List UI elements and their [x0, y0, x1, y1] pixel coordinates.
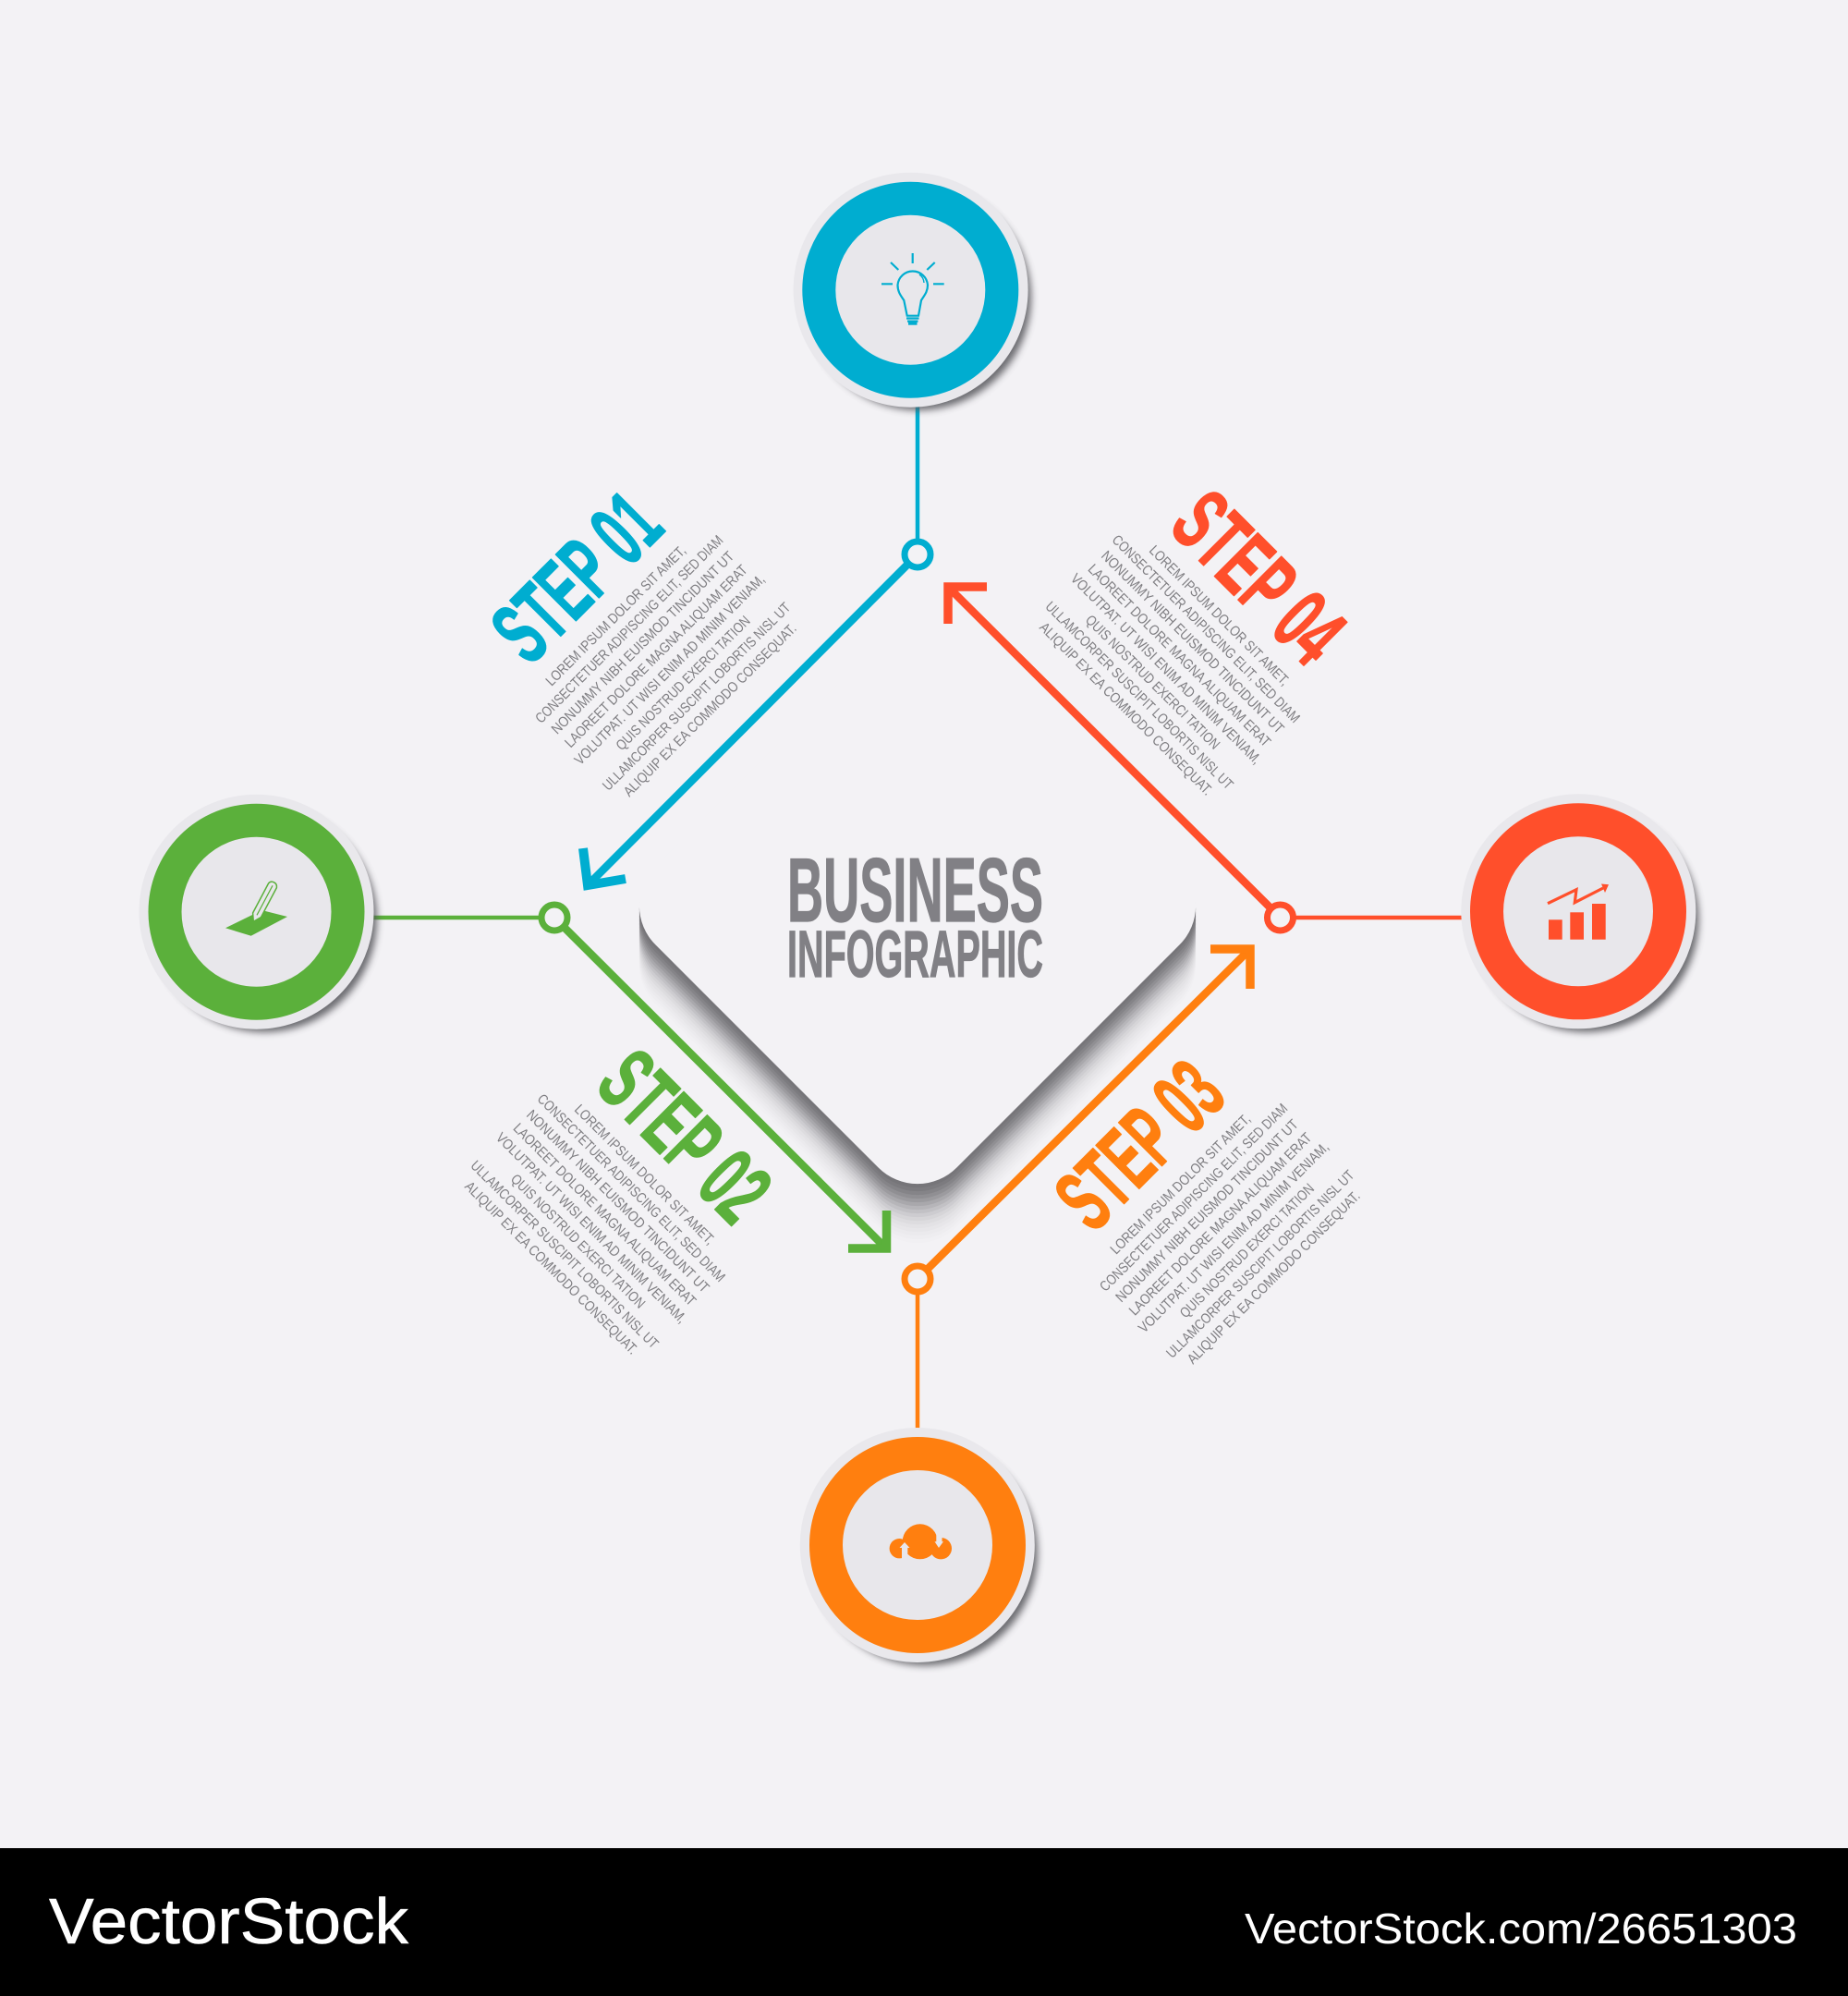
text block: step 03 body: LAOREET DOLORE MAGNA ALIQUAM ERAT — [1126, 1130, 1316, 1319]
title: business infographic: BUSINESS — [787, 839, 1043, 941]
text block: step 03 body: ALIQUIP EX EA COMMODO CONSEQUAT. — [1185, 1188, 1364, 1368]
circle badge: blue lightbulb — [794, 173, 1031, 410]
text block: step 04 body: LAOREET DOLORE MAGNA ALIQUAM ERAT — [1085, 562, 1273, 750]
heading: step 03: STEP 03 — [1037, 1042, 1243, 1248]
text block: step 02 body: ULLAMCORPER SUSCIPIT LOBORTIS NISL UT — [468, 1158, 662, 1352]
text block: step 04 body: NONUMMY NIBH EUISMOD TINCIDUNT UT — [1098, 548, 1287, 737]
heading: step 04: STEP 04 — [1153, 472, 1364, 683]
circle badge: orange cloud — [800, 1428, 1038, 1665]
text block: step 02 body: CONSECTETUER ADIPISCING ELIT, SED DIAM — [534, 1091, 728, 1285]
text block: step 04 body: VOLUTPAT. UT WISI ENIM AD MINIM VENIAM, — [1067, 571, 1264, 768]
arrow: green step 02 — [372, 905, 887, 1248]
text block: step 04 body: QUIS NOSTRUD EXERCI TATION — [1082, 613, 1222, 753]
text block: step 01 body: LAOREET DOLORE MAGNA ALIQUAM ERAT — [562, 562, 751, 751]
circle badge: red chart — [1461, 794, 1698, 1032]
text block: step 04 body: CONSECTETUER ADIPISCING ELIT, SED DIAM — [1109, 532, 1303, 726]
heading: step 01: STEP 01 — [473, 474, 680, 681]
text block: step 03 body — [1082, 1086, 1372, 1376]
text block: step 01 body: VOLUTPAT. UT WISI ENIM AD MINIM VENIAM, — [572, 572, 769, 769]
icon: lightbulb — [881, 253, 944, 323]
text block: step 01 body: ALIQUIP EX EA COMMODO CONSEQUAT. — [621, 621, 800, 800]
centre diamond with stepped shadow — [616, 604, 1219, 1266]
panel: step 02 — [453, 1031, 789, 1367]
text block: step 03 body: LOREM IPSUM DOLOR SIT AMET, — [1108, 1112, 1254, 1258]
text block: step 03 body: QUIS NOSTRUD EXERCI TATION — [1177, 1181, 1318, 1321]
text block: step 01 body: LOREM IPSUM DOLOR SIT AMET, — [543, 543, 689, 689]
arrow: red step 04 — [948, 587, 1462, 931]
text block: step 04 body: LOREM IPSUM DOLOR SIT AMET, — [1146, 542, 1292, 689]
text block: step 03 body: ULLAMCORPER SUSCIPIT LOBORTIS NISL UT — [1163, 1167, 1358, 1361]
icon: growth chart — [1548, 883, 1609, 940]
title: business infographic — [787, 839, 1043, 992]
text block: step 04 body — [1027, 517, 1318, 808]
footer brand: VectorStock — [49, 1885, 409, 1957]
text block: step 03 body: VOLUTPAT. UT WISI ENIM AD MINIM VENIAM, — [1136, 1139, 1332, 1336]
text block: step 02 body: NONUMMY NIBH EUISMOD TINCIDUNT UT — [523, 1107, 712, 1296]
icon: cloud with arrows — [890, 1524, 952, 1560]
text block: step 04 body: ULLAMCORPER SUSCIPIT LOBORTIS NISL UT — [1042, 599, 1236, 793]
text block: step 02 body: VOLUTPAT. UT WISI ENIM AD MINIM VENIAM, — [492, 1130, 689, 1327]
text block: step 02 body: LOREM IPSUM DOLOR SIT AMET, — [571, 1101, 717, 1248]
text block: step 01 body: ULLAMCORPER SUSCIPIT LOBORTIS NISL UT — [600, 600, 795, 794]
heading: step 02: STEP 02 — [579, 1031, 789, 1241]
text block: step 03 body: NONUMMY NIBH EUISMOD TINCIDUNT UT — [1112, 1116, 1302, 1306]
text block: step 01 body: CONSECTETUER ADIPISCING ELIT, SED DIAM — [532, 532, 726, 726]
text block: step 01 body — [517, 517, 808, 809]
circle badge: green pencil — [139, 795, 377, 1032]
text block: step 02 body: LAOREET DOLORE MAGNA ALIQUAM ERAT — [510, 1121, 699, 1309]
arrow: orange step 03 — [905, 949, 1250, 1430]
panel: step 01 — [473, 474, 808, 809]
arrow: blue step 01 — [583, 407, 930, 885]
text block: step 02 body — [453, 1077, 743, 1367]
icon: pencil on paper — [225, 882, 287, 936]
footer url: VectorStock.com/26651303 — [1245, 1905, 1797, 1953]
text block: step 04 body: ALIQUIP EX EA COMMODO CONSEQUAT. — [1036, 620, 1215, 798]
text block: step 03 body: CONSECTETUER ADIPISCING ELIT, SED DIAM — [1097, 1101, 1291, 1295]
text block: step 02 body: QUIS NOSTRUD EXERCI TATION — [507, 1172, 648, 1312]
text block: step 01 body: QUIS NOSTRUD EXERCI TATION — [614, 614, 754, 754]
panel: step 04 — [1027, 472, 1364, 808]
footer band — [0, 1848, 1848, 1996]
text block: step 01 body: NONUMMY NIBH EUISMOD TINCIDUNT UT — [549, 548, 737, 737]
panel: step 03 — [1037, 1042, 1372, 1376]
text block: step 02 body: ALIQUIP EX EA COMMODO CONSEQUAT. — [461, 1179, 640, 1357]
title: business infographic: INFOGRAPHIC — [787, 919, 1043, 992]
